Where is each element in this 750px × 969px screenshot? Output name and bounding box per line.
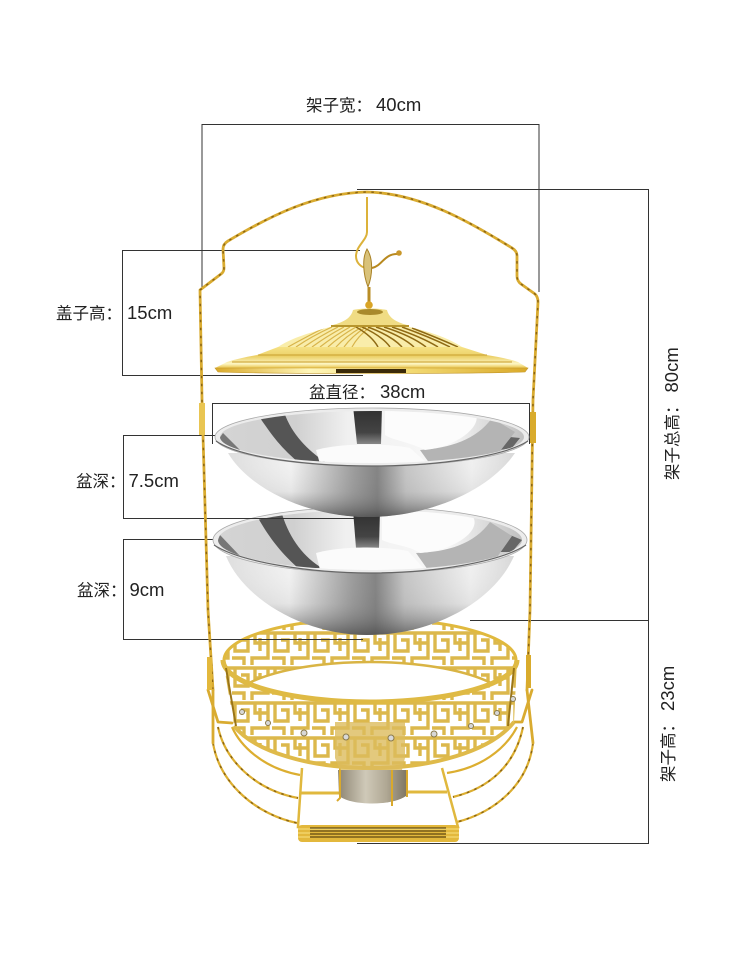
label: lid height: 盖子高： 15cm [56,302,172,323]
label: rack width: 架子宽：40cm [306,94,421,115]
hook [356,197,367,268]
label: basin diameter: 盆直径： 38cm [309,381,425,402]
label: basin depth lower: 盆深：9cm [77,579,164,600]
rhinestones [240,696,516,741]
ring stand: back wall [222,622,518,682]
lower steel basin [213,507,527,635]
lid with hook handle [215,197,528,374]
burner stand frame [298,768,459,842]
dimension lines [122,124,648,844]
lid rim [215,368,528,374]
fuel cup [338,770,407,804]
ribbed dome [278,327,462,347]
label: basin depth upper: 盆深：7.5cm [76,470,179,491]
basket wires [207,655,533,823]
ring stand: front lattice band [223,660,517,770]
finial base [333,308,407,325]
sleeves [199,403,205,435]
handle bar [298,825,459,842]
dome tiers [215,347,528,368]
center lattice plaque [335,722,405,770]
label: rack total height: 架子总高：80cm [661,347,682,480]
rack frame: twisted gold handle and rods [199,192,538,690]
upper steel basin [215,406,529,517]
label: rack base height: 架子高：23cm [657,666,678,782]
ornament [364,249,372,287]
dimension line extensions over basins and ring [214,518,363,640]
